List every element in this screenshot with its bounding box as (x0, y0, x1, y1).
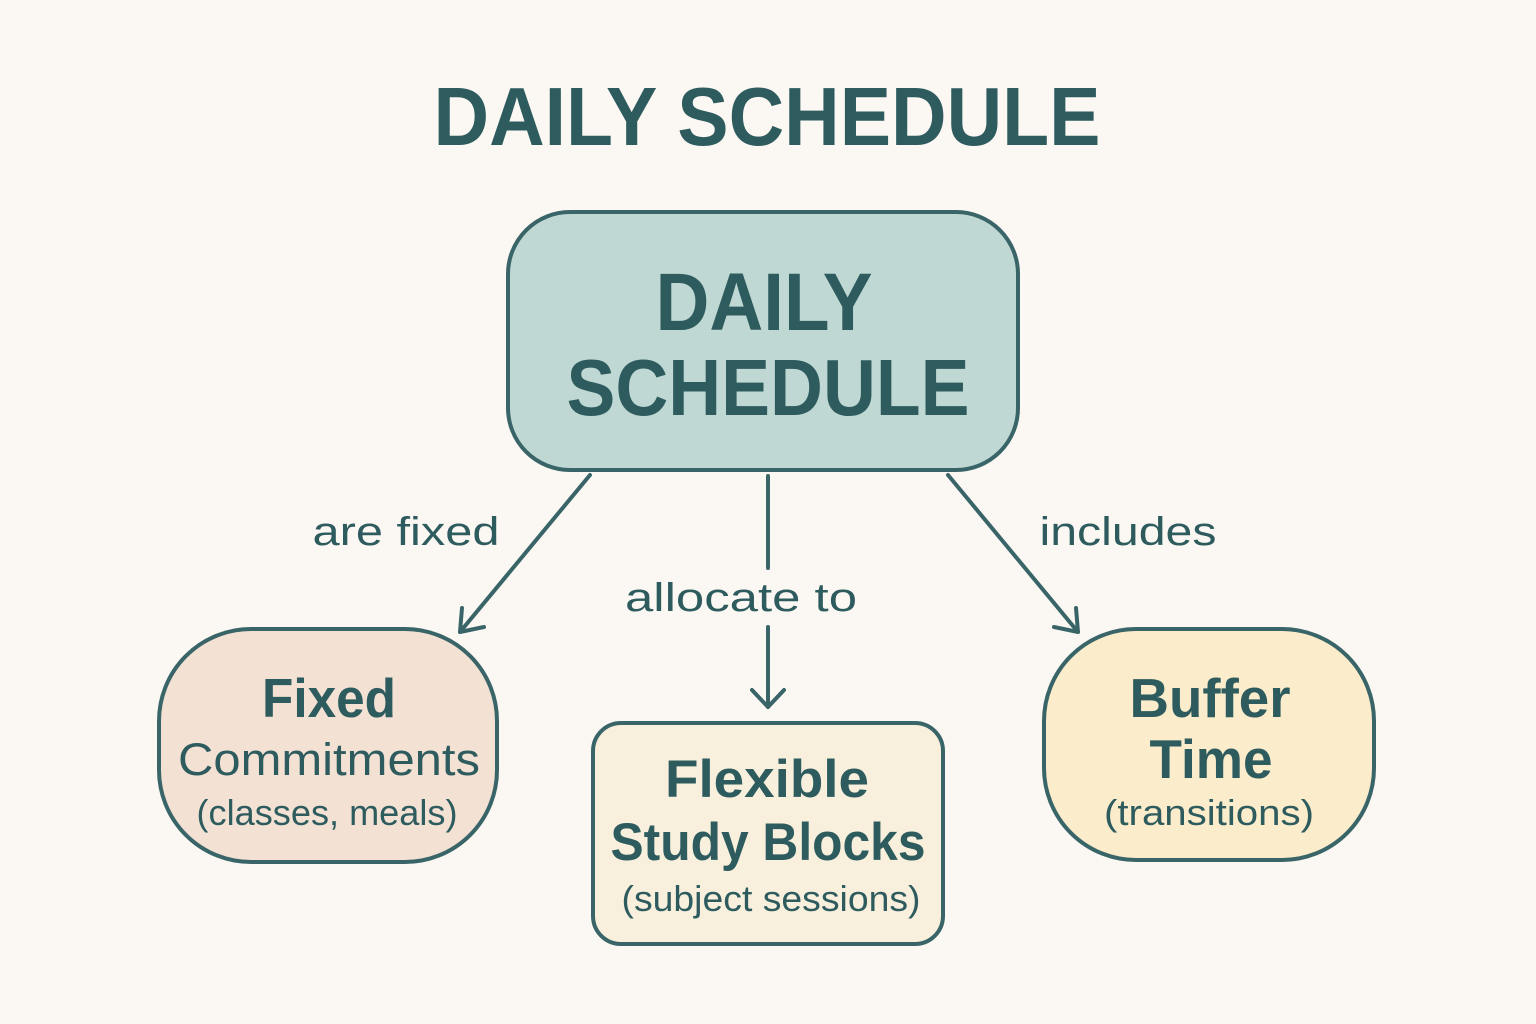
node: buffer time (1044, 629, 1374, 860)
title: DAILY SCHEDULE (434, 70, 1100, 163)
node: fixed commitments (159, 629, 497, 862)
node: fixed commitments: Fixed (262, 667, 396, 729)
label: are fixed: are fixed (312, 510, 500, 554)
node: buffer time: (transitions) (1104, 792, 1314, 833)
node: buffer time: Buffer (1130, 667, 1290, 729)
node: flexible study blocks: Study Blocks (610, 813, 926, 872)
central node: daily schedule: SCHEDULE (566, 343, 970, 432)
arrow: right to buffer time (948, 475, 1078, 632)
node: flexible study blocks (593, 723, 943, 944)
arrow: middle to flexible study blocks (752, 476, 784, 707)
node: fixed commitments: Commitments (178, 734, 480, 785)
node: fixed commitments: (classes, meals) (196, 792, 458, 833)
central node: daily schedule: DAILY (656, 257, 872, 348)
arrow: left to fixed commitments (460, 475, 590, 632)
label: includes: includes (1040, 510, 1216, 554)
label: allocate to: allocate to (625, 576, 857, 620)
central node: daily schedule (508, 212, 1018, 470)
node: flexible study blocks: Flexible (665, 750, 869, 809)
node: flexible study blocks: (subject sessions) (622, 878, 920, 919)
node: buffer time: Time (1150, 728, 1272, 790)
